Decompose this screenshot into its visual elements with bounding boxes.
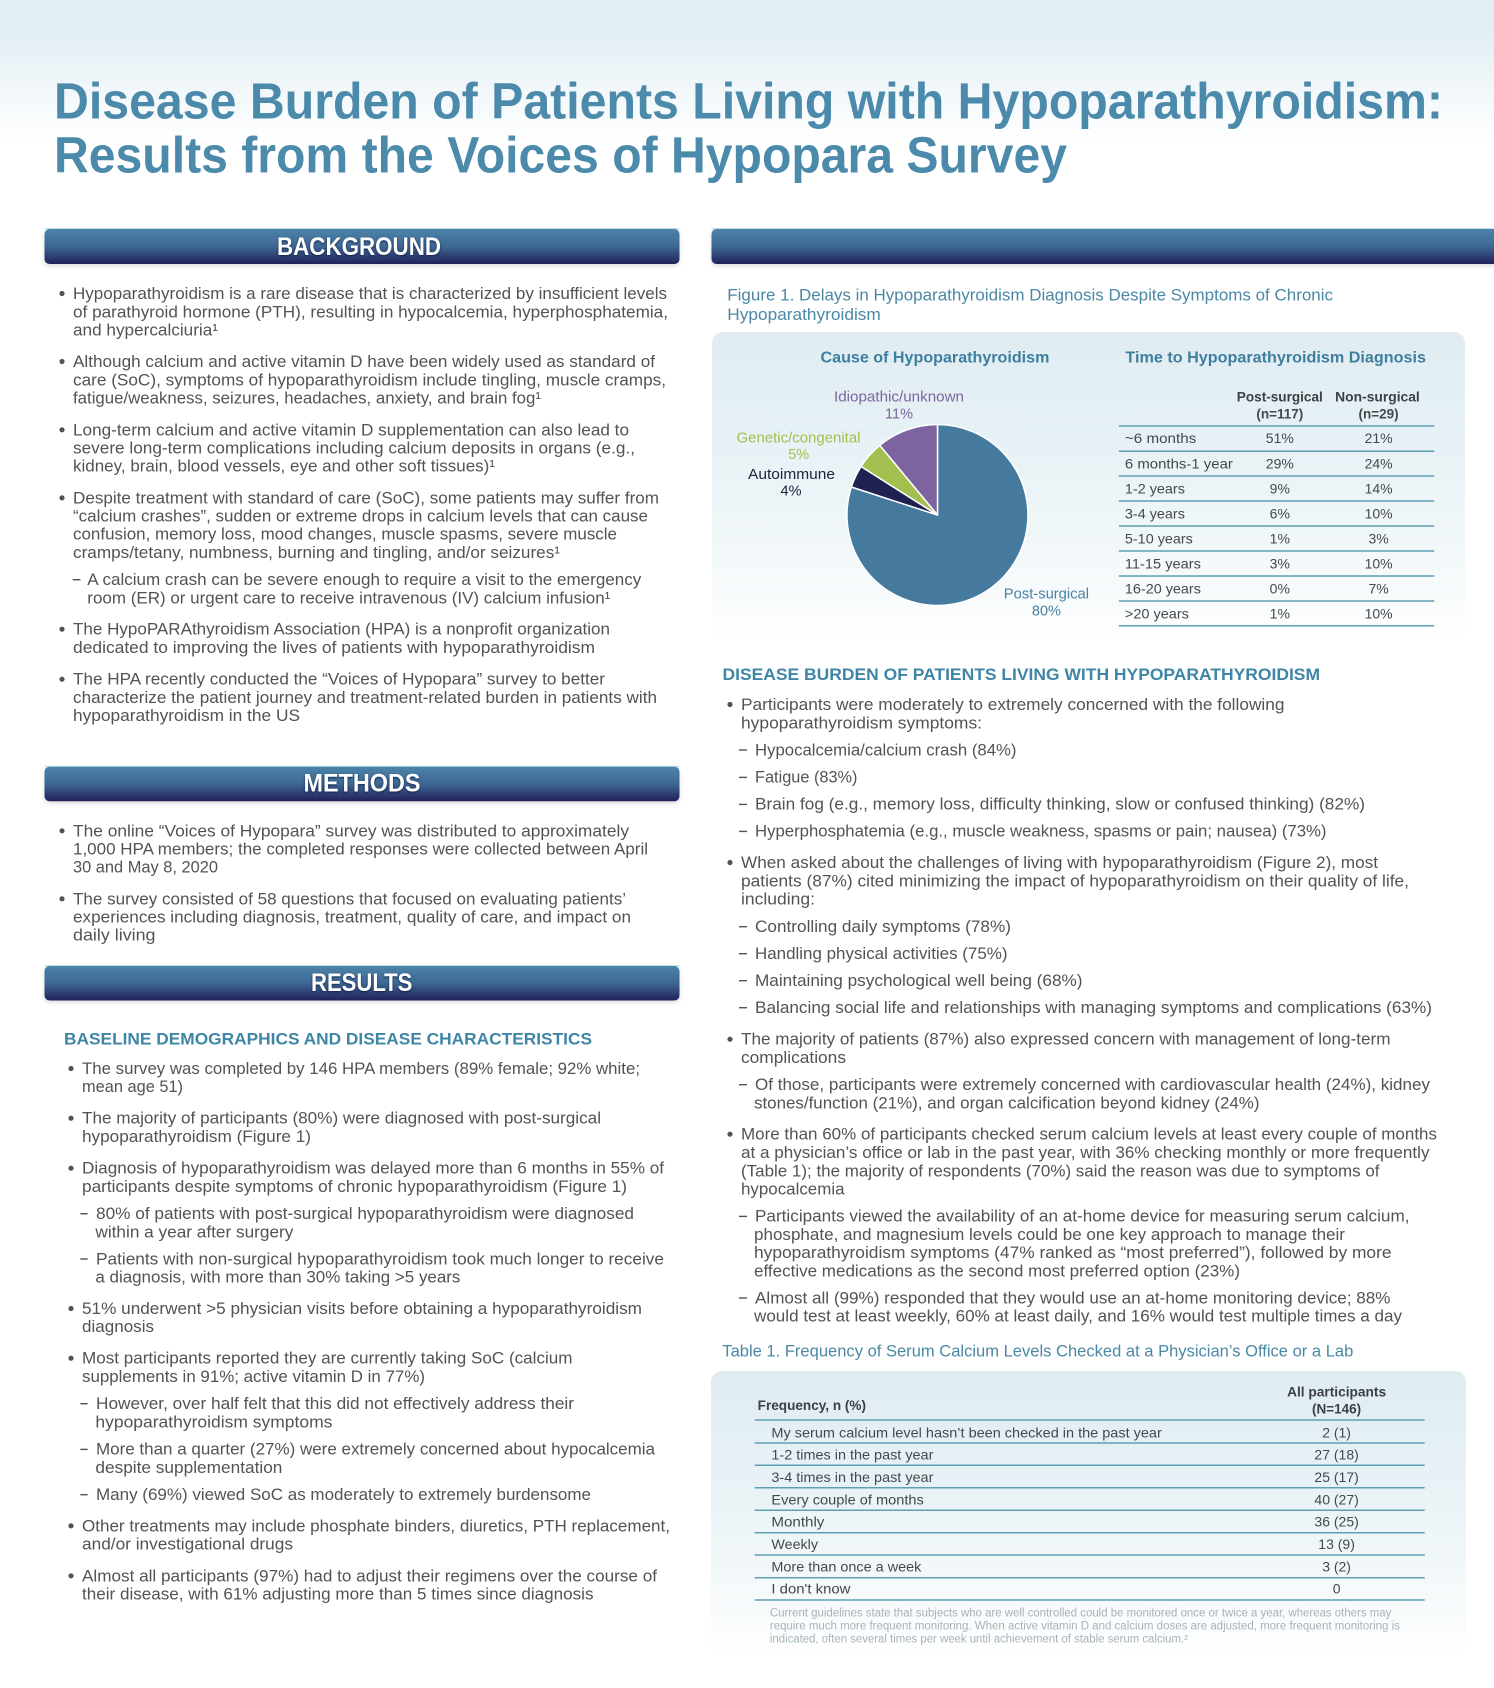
bullet: survey questions: The survey consisted of 58 questions that focused on evaluating patients’ [73,890,626,908]
sub-bullet: SoC not effective [80,1395,575,1431]
bullet: challenges: patients (87%) cited minimizing the impact of hypoparathyroidism on their quality of life, [741,872,1409,890]
bullet: regimen adjustment: Almost all participants (97%) had to adjust their regimens over the course of [82,1567,657,1585]
bullet: other treatments: and/or investigational drugs [82,1536,293,1554]
table: frequency of serum calcium checks: All participants [1287,1385,1386,1400]
footnote: require much more frequent monitoring. When active vitamin D and calcium doses are adjusted, more frequent monitoring is [770,1621,1400,1633]
table: frequency of serum calcium checks: Every couple of months [771,1491,924,1507]
section header: results [44,965,680,1000]
table: frequency of serum calcium checks: 40 (27) [1314,1491,1359,1507]
sub-bullet: at-home device use: Almost all (99%) responded that they would use an at-home monitoring device; 88% [755,1289,1391,1307]
pie label: post-surgical: Post-surgical [1004,586,1089,602]
section header: background: BACKGROUND [277,233,441,261]
bullet: regimen adjustment: their disease, with 61% adjusting more than 5 times since diagnosis [82,1585,594,1603]
table: frequency of serum calcium checks: Weekly [771,1536,818,1552]
table: frequency of serum calcium checks: 1-2 times in the past year [771,1447,934,1463]
table: time to diagnosis: 16-20 years [1125,580,1201,596]
table: time to diagnosis: 29% [1266,455,1294,471]
bullet: other treatments: Other treatments may include phosphate binders, diuretics, PTH replacement, [82,1517,670,1535]
sub-bullet: daily symptoms: Controlling daily symptoms (78%) [755,918,1011,936]
sub-bullet: hypocalcemia concern: despite supplementation [95,1459,282,1477]
section header: methods: METHODS [304,770,420,798]
bullet: diagnosis delay [68,1160,664,1196]
panel: figure 1 [712,332,1465,644]
bullet: standard of care symptoms: care (SoC), symptoms of hypoparathyroidism include tingling, muscle cramps, [73,371,666,389]
table: frequency of serum calcium checks: 0 [1333,1581,1341,1597]
bullet: long-term complications: Long-term calcium and active vitamin D supplementation can also lead to [73,421,629,439]
bullet: serum calcium checks [727,1126,1437,1198]
table: time to diagnosis: >20 years [1125,605,1189,621]
table: frequency of serum calcium checks: More than once a week [771,1558,922,1574]
footnote: Current guidelines state that subjects who are well controlled could be monitored once or twice a year, whereas others may [770,1608,1392,1620]
table: frequency of serum calcium checks: 25 (17) [1314,1469,1359,1485]
section header: right column (blank) [712,228,1494,264]
bullet: survey questions: experiences including diagnosis, treatment, quality of care, and impact on [73,909,631,927]
table: time to diagnosis: Post-surgical [1237,390,1323,405]
bullet: standard of care symptoms [59,353,666,408]
bullet: serum calcium checks: hypocalcemia [741,1180,845,1198]
bullet: survey distribution: The online “Voices of Hypopara” survey was distributed to approximately [73,822,630,840]
table: time to diagnosis: 10% [1365,605,1393,621]
table: time to diagnosis: 11-15 years [1125,555,1201,571]
table: frequency of serum calcium checks: 3-4 times in the past year [771,1469,934,1485]
table: time to diagnosis: 3% [1368,530,1389,546]
pie label: autoimmune: 4% [781,484,802,500]
sub-bullet: post-surgical diagnosis timing: within a year after surgery [94,1223,294,1241]
sub-bullet: at-home device use: would test at least weekly, 60% at least daily, and 16% would test multiple times a day [753,1308,1403,1326]
bullet: challenges: When asked about the challenges of living with hypoparathyroidism (Figure 2), most [741,854,1378,872]
bullet: physician visits: diagnosis [82,1318,154,1336]
bullet: long-term complications [59,421,635,476]
bullet: post-surgical majority: hypoparathyroidism (Figure 1) [82,1128,311,1146]
table: time to diagnosis: ~6 months [1125,430,1196,446]
panel: table 1 [711,1371,1466,1656]
bullet: survey distribution: 30 and May 8, 2020 [73,859,218,877]
table: time to diagnosis: 9% [1270,480,1290,496]
table: time to diagnosis: 14% [1365,480,1393,496]
bullet: challenges: including: [741,890,815,908]
bullet: standard of care symptoms: fatigue/weakness, seizures, headaches, anxiety, and brain fog¹ [73,390,542,408]
sub-bullet: calcium crash severity: A calcium crash can be severe enough to require a visit to the emergency [87,571,642,589]
bullet: regimen adjustment [68,1567,657,1603]
table: time to diagnosis: 3% [1270,555,1290,571]
text block: background bullets [59,285,668,725]
table: time to diagnosis: 21% [1365,430,1393,446]
bullet: calcium crashes [59,489,659,562]
sub-bullet: physical activities: Handling physical activities (75%) [755,945,1008,963]
bullet: calcium crashes: “calcium crashes”, sudden or extreme drops in calcium levels that can cause [73,508,648,526]
sub-bullet: non-surgical diagnosis timing [80,1250,664,1287]
title: Results from the Voices of Hypopara Survey [54,127,1068,184]
text block: baseline results bullets [68,1060,670,1603]
table: time to diagnosis: 51% [1266,430,1294,446]
bullet: respondents: The survey was completed by 146 HPA members (89% female; 92% white; [82,1060,640,1078]
bullet: long-term complications concern: The majority of patients (87%) also expressed concern with management of long-term [741,1031,1390,1049]
bullet: standard of care symptoms: Although calcium and active vitamin D have been widely used as standard of [73,353,655,371]
table: time to diagnosis: 3-4 years [1125,505,1185,521]
bullet: disease definition: and hypercalciuria¹ [73,321,219,339]
pie label: genetic: Genetic/congenital [736,430,860,446]
bullet: long-term complications: kidney, brain, blood vessels, eye and other soft tissues)¹ [73,458,496,476]
bullet: serum calcium checks: at a physician’s office or lab in the past year, with 36% checking monthly or more frequently [741,1144,1430,1162]
sub-bullet: at-home device preference: Participants viewed the availability of an at-home device for measuring serum calcium, [755,1208,1410,1226]
sub-bullet: post-surgical diagnosis timing [80,1205,634,1241]
table: frequency of serum calcium checks: 27 (18) [1314,1447,1359,1463]
bullet: disease definition: of parathyroid hormone (PTH), resulting in hypocalcemia, hyperphosphatemia, [73,303,668,321]
table: frequency of serum calcium checks: Monthly [771,1514,824,1530]
table: time to diagnosis [1119,390,1434,626]
sub-bullet: social life: Balancing social life and relationships with managing symptoms and complications (63%) [755,999,1432,1017]
sub-bullet: non-surgical diagnosis timing: Patients with non-surgical hypoparathyroidism took much longer to receive [96,1250,664,1268]
table: frequency of serum calcium checks: My serum calcium level hasn’t been checked in the past year [771,1424,1162,1440]
table: time to diagnosis: 6% [1270,505,1290,521]
bullet: survey purpose: hypoparathyroidism in the US [73,707,300,725]
bullet: respondents [68,1060,640,1096]
pie label: idiopathic: 11% [885,406,913,422]
sub-bullet: brain fog: Brain fog (e.g., memory loss, difficulty thinking, slow or confused thinking) (82%) [755,796,1365,814]
bullet: survey distribution: 1,000 HPA members; the completed responses were collected between April [73,841,648,859]
heading: cause of hypoparathyroidism: Cause of Hypoparathyroidism [820,350,1049,367]
text block: disease burden bullets [727,696,1437,1326]
bullet: serum calcium checks: More than 60% of participants checked serum calcium levels at least every couple of months [741,1126,1437,1144]
table: time to diagnosis: 1-2 years [1125,480,1185,496]
sub-bullet: extreme concerns: Of those, participants were extremely concerned with cardiovascular health (24%), kidney [755,1076,1431,1094]
bullet: long-term complications concern [727,1031,1390,1067]
table: frequency of serum calcium checks: 2 (1) [1322,1424,1351,1440]
sub-bullet: fatigue: Fatigue (83%) [755,769,858,787]
pie label: autoimmune [748,467,835,500]
figure 1 caption: Hypoparathyroidism [727,306,881,324]
bullet: diagnosis delay: Diagnosis of hypoparathyroidism was delayed more than 6 months in 55% of [82,1160,664,1178]
sub-bullet: post-surgical diagnosis timing: 80% of patients with post-surgical hypoparathyroidism were diagnosed [96,1205,634,1223]
title: Disease Burden of Patients Living with Hypoparathyroidism: [54,72,1443,129]
bullet: survey distribution [59,822,648,877]
bullet: calcium crashes: confusion, memory loss, mood changes, muscle spasms, severe muscle [73,526,617,544]
table: frequency of serum calcium checks: (N=146) [1312,1401,1361,1416]
table: frequency of serum calcium checks: 3 (2) [1322,1558,1351,1574]
bullet: symptom concerns: Participants were moderately to extremely concerned with the following [741,696,1284,714]
figure 1 caption: Figure 1. Delays in Hypoparathyroidism Diagnosis Despite Symptoms of Chronic [727,287,1333,305]
bullet: physician visits [68,1300,642,1336]
bullet: HPA organization: dedicated to improving the lives of patients with hypoparathyroidism [73,639,595,657]
table: frequency of serum calcium checks: 13 (9) [1318,1536,1355,1552]
bullet: calcium crashes: Despite treatment with standard of care (SoC), some patients may suffer from [73,489,659,507]
bullet: current SoC: Most participants reported they are currently taking SoC (calcium [82,1350,572,1368]
heading: disease burden: DISEASE BURDEN OF PATIENTS LIVING WITH HYPOPARATHYROIDISM [722,666,1320,684]
bullet: symptom concerns [727,696,1284,732]
sub-bullet: at-home device preference: effective medications as the second most preferred option (23%) [754,1262,1240,1280]
table: time to diagnosis: 1% [1270,530,1290,546]
table: time to diagnosis: Non-surgical [1335,390,1420,405]
bullet: other treatments [68,1517,670,1554]
table: time to diagnosis: 0% [1270,580,1290,596]
bullet: survey purpose: characterize the patient journey and treatment-related burden in patients with [73,689,657,707]
bullet: current SoC [68,1350,573,1386]
pie label: idiopathic: Idiopathic/unknown [834,390,964,406]
sub-bullet: at-home device use [739,1289,1403,1326]
sub-bullet: hypocalcemia concern: More than a quarter (27%) were extremely concerned about hypocalcemia [96,1441,656,1459]
bullet: respondents: mean age 51) [82,1078,183,1096]
table: time to diagnosis: 6 months-1 year [1125,455,1233,471]
table: time to diagnosis: 24% [1365,455,1393,471]
bullet: symptom concerns: hypoparathyroidism symptoms: [741,714,982,732]
bullet: disease definition [59,285,668,339]
pie label: genetic [736,430,860,463]
footnote [770,1608,1400,1646]
sub-bullet: non-surgical diagnosis timing: a diagnosis, with more than 30% taking >5 years [95,1269,460,1287]
bullet: post-surgical majority [68,1110,601,1146]
bullet: diagnosis delay: participants despite symptoms of chronic hypoparathyroidism (Figure 1) [82,1178,627,1196]
sub-bullet: hypocalcemia: Hypocalcemia/calcium crash (84%) [755,741,1016,759]
top gradient background [0,0,1494,140]
pie chart: cause [847,424,1028,606]
sub-bullet: calcium crash severity: room (ER) or urgent care to receive intravenous (IV) calcium infusion¹ [87,589,611,607]
pie label: genetic: 5% [788,447,809,463]
sub-bullet: SoC burden: Many (69%) viewed SoC as moderately to extremely burdensome [96,1486,591,1504]
bullet: serum calcium checks: (Table 1); the majority of respondents (70%) said the reason was due to symptoms of [741,1162,1380,1180]
bullet: HPA organization [59,621,610,657]
sub-bullet: extreme concerns: stones/function (21%), and organ calcification beyond kidney (24%) [754,1094,1260,1112]
sub-bullet: extreme concerns [739,1076,1431,1112]
title [54,72,1443,184]
section header: background [44,228,680,264]
pie label: autoimmune: Autoimmune [748,467,835,483]
pie label: post-surgical: 80% [1032,603,1061,619]
sub-bullet: SoC not effective: However, over half felt that this did not effectively address their [96,1395,575,1413]
bullet: calcium crashes: cramps/tetany, numbness, burning and tingling, and/or seizures¹ [73,544,561,562]
text block: methods bullets [59,822,648,945]
table: time to diagnosis: 7% [1368,580,1389,596]
bullet: survey questions: daily living [73,927,156,945]
bullet: post-surgical majority: The majority of participants (80%) were diagnosed with post-surgical [82,1110,601,1128]
table: frequency of serum calcium checks: I don't know [771,1581,851,1597]
table: time to diagnosis: (n=117) [1256,406,1303,421]
sub-bullet: hypocalcemia concern [80,1441,656,1477]
bullet: survey questions [59,890,631,945]
sub-bullet: SoC not effective: hypoparathyroidism symptoms [95,1413,332,1431]
table: frequency of serum calcium checks [755,1385,1425,1600]
table: frequency of serum calcium checks: Frequency, n (%) [758,1398,866,1413]
table: time to diagnosis: (n=29) [1359,406,1399,421]
section header: results: RESULTS [311,969,412,997]
section header: methods [44,766,680,801]
heading: baseline demographics: BASELINE DEMOGRAPHICS AND DISEASE CHARACTERISTICS [64,1030,592,1048]
bullet: long-term complications concern: complications [741,1049,846,1067]
figure 1 caption [727,287,1333,324]
table: time to diagnosis: 10% [1365,505,1393,521]
bullet: survey purpose [59,671,657,725]
sub-bullet: at-home device preference [739,1208,1410,1280]
bullet: HPA organization: The HypoPARAthyroidism Association (HPA) is a nonprofit organization [73,621,610,639]
table: frequency of serum calcium checks: 36 (25) [1314,1514,1359,1530]
pie label: idiopathic [834,390,964,422]
heading: time to diagnosis: Time to Hypoparathyroidism Diagnosis [1125,350,1426,367]
table 1 caption: Table 1. Frequency of Serum Calcium Levels Checked at a Physician’s Office or a Lab [722,1343,1353,1361]
table: time to diagnosis: 5-10 years [1125,530,1193,546]
table: time to diagnosis: 1% [1270,605,1290,621]
bullet: challenges [727,854,1409,908]
sub-bullet: at-home device preference: hypoparathyroidism symptoms (47% ranked as “most preferred”), followed by more [754,1244,1392,1262]
bullet: long-term complications: severe long-term complications including calcium deposits in organs (e.g., [73,440,635,458]
pie label: post-surgical [1004,586,1089,619]
bullet: survey purpose: The HPA recently conducted the “Voices of Hypopara” survey to better [73,671,606,689]
sub-bullet: hyperphosphatemia: Hyperphosphatemia (e.g., muscle weakness, spasms or pain; nausea) (73%) [755,823,1326,841]
sub-bullet: calcium crash severity [73,571,642,607]
sub-bullet: at-home device preference: phosphate, and magnesium levels could be one key approach to manage their [754,1226,1346,1244]
sub-bullet: psychological well being: Maintaining psychological well being (68%) [755,972,1082,990]
table: time to diagnosis: 10% [1365,555,1393,571]
bullet: current SoC: supplements in 91%; active vitamin D in 77%) [82,1368,425,1386]
bullet: physician visits: 51% underwent >5 physician visits before obtaining a hypoparathyroidism [82,1300,642,1318]
footnote: indicated, often several times per week until achievement of stable serum calcium.² [770,1634,1188,1646]
bullet: disease definition: Hypoparathyroidism is a rare disease that is characterized by insufficient levels [73,285,667,303]
